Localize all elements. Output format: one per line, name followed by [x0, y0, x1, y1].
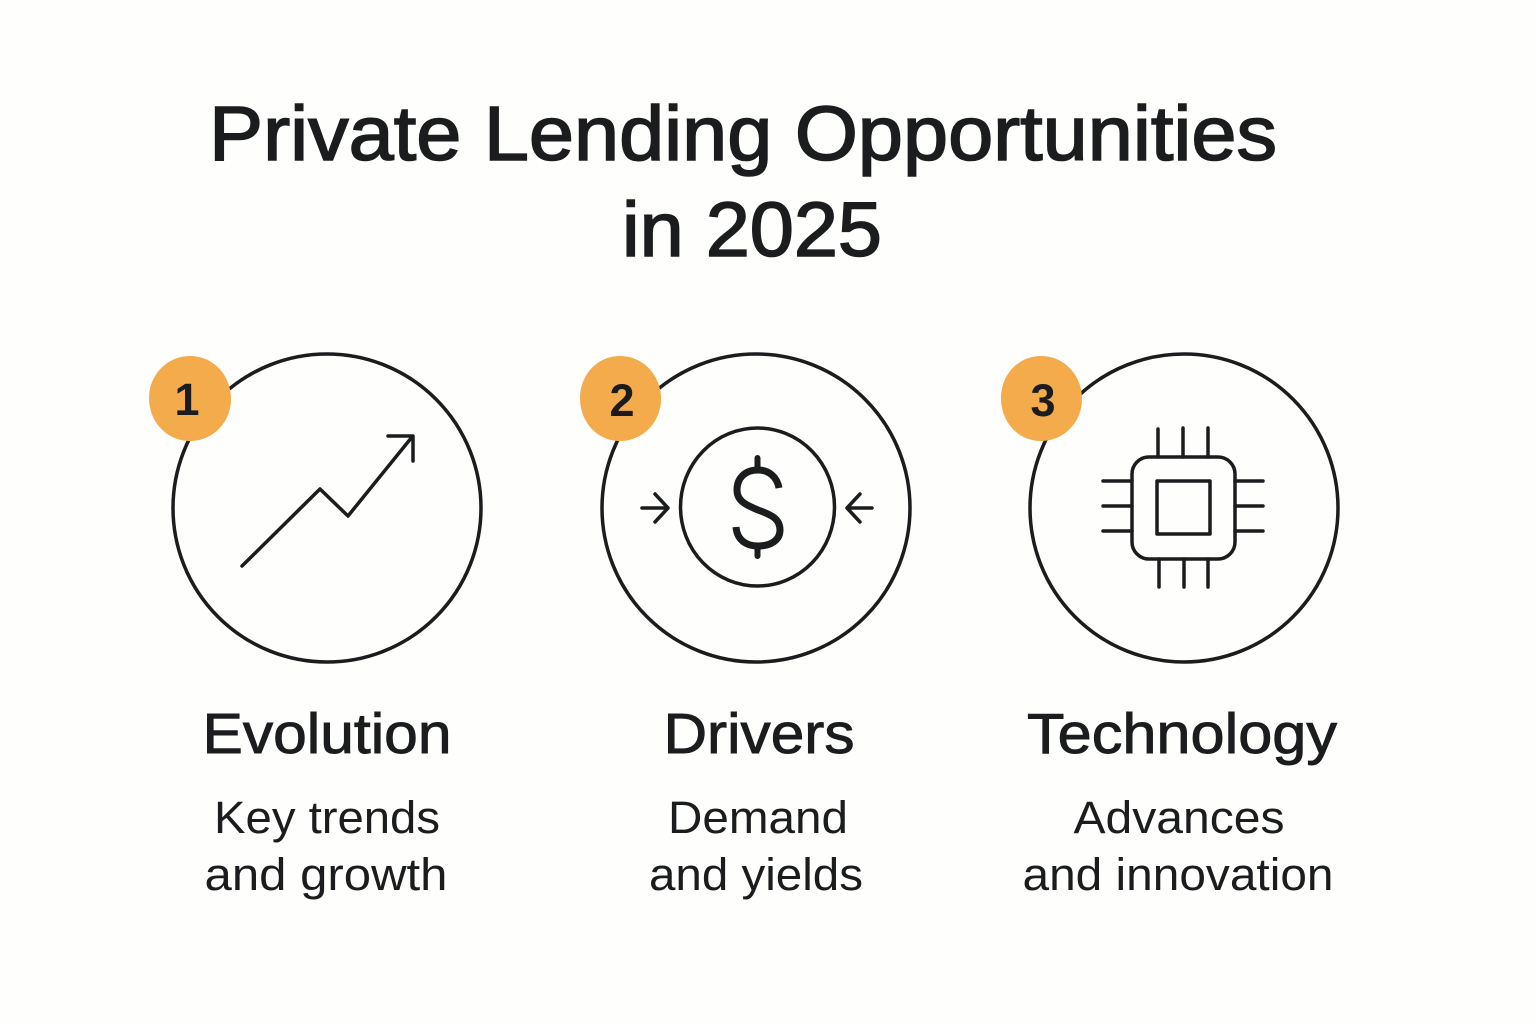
number badge 3 [1001, 356, 1082, 441]
number badge 1: 1 [174, 374, 200, 425]
number badge 1 [149, 356, 231, 441]
title: Private Lending Opportunities [209, 91, 1277, 177]
number badge 3: 3 [1030, 375, 1056, 426]
title [209, 91, 1277, 273]
title: in 2025 [622, 187, 882, 273]
description: Key trends and growth: and growth [204, 849, 448, 900]
description: Advances and innovation: Advances [1074, 792, 1284, 843]
description: Demand and yields: and yields [649, 849, 863, 900]
heading: Evolution: Evolution [202, 702, 452, 766]
description: Advances and innovation: and innovation [1022, 849, 1334, 900]
icon: dollar circle with arrows [602, 354, 910, 662]
icon: microchip [1030, 354, 1338, 662]
panel: drivers [580, 354, 910, 900]
description: Demand and yields: Demand [668, 792, 848, 843]
heading: Technology: Technology [1027, 702, 1338, 766]
icon: circle with growth arrow [173, 354, 481, 662]
panel: technology [1001, 354, 1338, 900]
description: Demand and yields [649, 792, 863, 900]
number badge 2 [580, 356, 661, 441]
description: Key trends and growth [204, 792, 448, 900]
number badge 2: 2 [609, 375, 635, 426]
description: Advances and innovation [1022, 792, 1334, 900]
heading: Drivers: Drivers [664, 702, 854, 766]
panel: evolution [149, 354, 481, 900]
description: Key trends and growth: Key trends [214, 792, 440, 843]
